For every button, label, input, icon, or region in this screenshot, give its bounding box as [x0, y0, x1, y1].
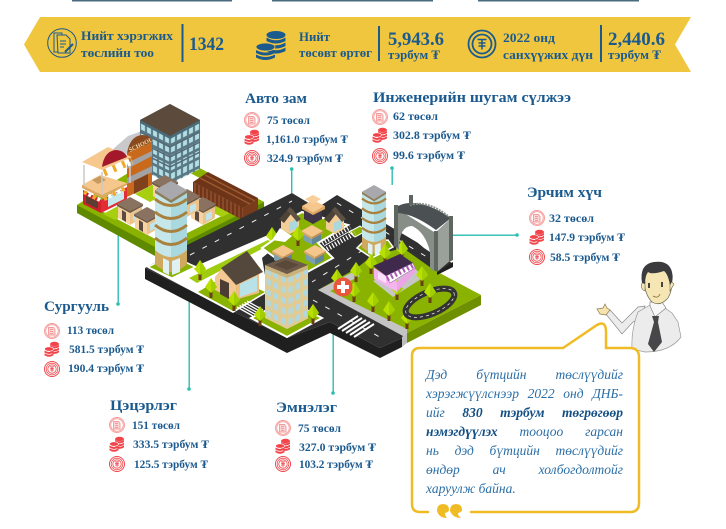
total projects text: Нийт хэрэгжих [81, 28, 174, 43]
total projects text: төслийн тоо [81, 45, 154, 60]
heading: Цэцэрлэг [110, 398, 177, 414]
panel: roads [244, 91, 348, 166]
zebra crossing [338, 316, 374, 337]
school building: SCHOOL [128, 137, 154, 154]
office tower [140, 104, 200, 184]
icon: quotation marks [437, 504, 462, 518]
panel: power [527, 185, 625, 264]
callout text: нэмэгдүүлэх тооцоо гарсан [426, 424, 623, 439]
callout text: өндөр ач холбогдолтойг [426, 462, 623, 477]
stats: 99.6 тэрбум ₮ [393, 148, 465, 162]
right platform: hospital and park [318, 185, 481, 347]
2022 funding value [608, 29, 665, 62]
stats [44, 323, 144, 376]
plinth under cylindrical tower [148, 255, 195, 278]
stats: 333.5 тэрбум ₮ [133, 437, 209, 451]
callout text: Дэд бүтцийн төслүүдийг [426, 367, 623, 382]
main road platform [145, 181, 452, 358]
panel: hospitals [276, 400, 376, 472]
stats [110, 418, 209, 472]
callout text: нь дэд бүтцийн төслүүдийг [426, 443, 623, 458]
summary banner [24, 17, 691, 72]
heading: Сургууль [44, 299, 109, 315]
stats: 147.9 тэрбум ₮ [549, 230, 625, 244]
road lane markings [190, 201, 432, 340]
tan building lot [251, 300, 322, 337]
stats [530, 210, 625, 264]
panel: kindergartens [110, 398, 209, 472]
bridge [394, 195, 453, 275]
stats: 1,161.0 тэрбум ₮ [266, 132, 348, 146]
supermarket [82, 147, 132, 213]
2022 funding text [503, 30, 594, 62]
pink shop [373, 254, 415, 292]
2022 funding value: 2,440.6 [608, 29, 665, 50]
callout text [425, 367, 623, 496]
total budget text [299, 29, 372, 60]
heading: Инженерийн шугам сүлжээ [373, 90, 571, 106]
total budget value: тэрбум ₮ [388, 47, 440, 62]
heading: Эрчим хүч [527, 185, 603, 201]
stats: 190.4 тэрбум ₮ [68, 361, 144, 375]
2022 funding text: санхүүжих дүн [503, 47, 594, 62]
divider [600, 25, 602, 62]
total budget value [388, 29, 444, 62]
stats: 75 төсөл [267, 113, 310, 127]
stats: 75 төсөл [298, 421, 341, 435]
stats: 62 төсөл [393, 109, 438, 123]
stats [244, 112, 348, 166]
total projects number: 1342 [189, 34, 224, 55]
divider [378, 26, 380, 61]
icon: coin stacks [256, 31, 286, 60]
cylindrical tower [155, 181, 187, 275]
racetrack [402, 283, 458, 323]
callout text: хэрэгжүүлснээр 2022 онд ДНБ- [426, 386, 623, 401]
stats: 151 төсөл [132, 418, 180, 432]
stats: 113 төсөл [67, 323, 114, 337]
total budget text: төсөвт өртөг [299, 45, 372, 60]
top edge bars [72, 0, 639, 2]
central houses [272, 195, 346, 265]
callout box [412, 324, 639, 518]
total budget text: Нийт [299, 29, 331, 44]
stats: 32 төсөл [549, 211, 594, 225]
tan apartment building [265, 257, 308, 329]
isometric city illustration [77, 104, 481, 358]
character: man in tie [597, 262, 681, 352]
2022 funding value: тэрбум ₮ [608, 47, 661, 62]
heading: Авто зам [245, 91, 307, 107]
divider [182, 24, 184, 62]
stats: 125.5 тэрбум ₮ [134, 457, 208, 471]
callout text: харуулж байна. [426, 481, 516, 496]
panel: schools [44, 299, 144, 376]
panel: engineering networks [372, 90, 571, 164]
school building [127, 135, 154, 197]
stats: 103.2 тэрбум ₮ [299, 457, 373, 471]
grey block behind school [112, 130, 150, 155]
lower lot [148, 227, 280, 316]
parking stripes [322, 227, 355, 249]
total budget value: 5,943.6 [388, 29, 444, 50]
house with gable roof [215, 251, 263, 300]
brown long building [193, 172, 258, 220]
courtyard [373, 264, 424, 297]
stats: 58.5 тэрбум ₮ [550, 250, 620, 264]
left platform: school district [77, 104, 264, 258]
stats [276, 420, 376, 472]
stats [372, 109, 471, 164]
stats: 581.5 тэрбум ₮ [69, 342, 144, 356]
total projects text [81, 28, 174, 60]
stats: 302.8 тэрбум ₮ [393, 128, 471, 142]
icon: tugrik coin [468, 30, 496, 58]
heading: Эмнэлэг [276, 400, 337, 416]
small houses [117, 197, 143, 225]
2022 funding text: 2022 онд [503, 30, 555, 45]
hospital marker [334, 278, 352, 296]
central green lots [262, 212, 366, 276]
teal leader lines [116, 166, 519, 395]
park trees [331, 240, 428, 329]
second tower [362, 185, 386, 256]
icon: project documents [48, 29, 76, 57]
stats: 327.0 тэрбум ₮ [299, 440, 376, 454]
callout text: ийг 830 тэрбум төгрөгөөр [426, 405, 623, 420]
stats: 324.9 тэрбум ₮ [267, 151, 343, 165]
